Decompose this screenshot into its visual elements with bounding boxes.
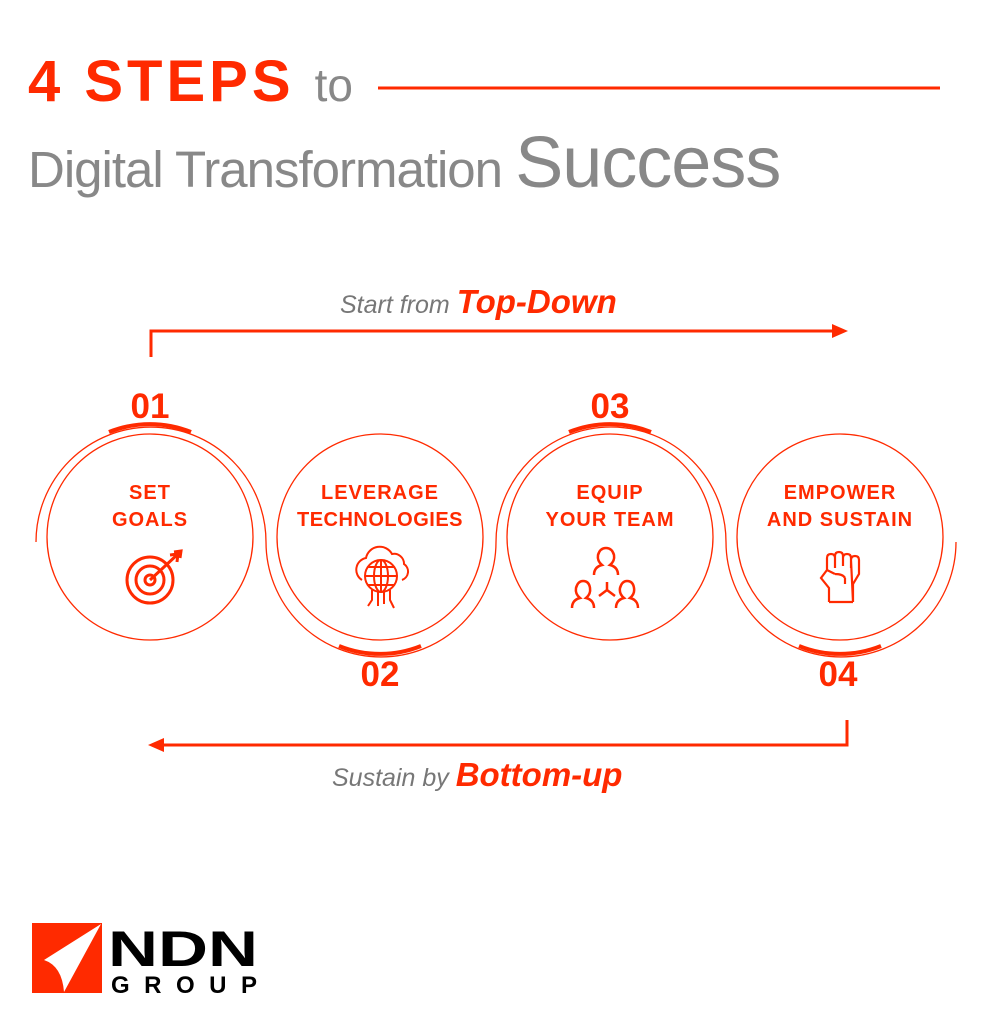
icon: team (572, 548, 638, 608)
step 4: EMPOWER (784, 482, 896, 504)
logo: NDN (108, 921, 258, 977)
bottom arrow (148, 720, 847, 793)
step 2: 02 (361, 655, 399, 694)
wave path (36, 427, 956, 657)
step 3 (507, 387, 713, 640)
title line 1: 4 STEPS to (28, 49, 353, 114)
step 2 (277, 434, 483, 694)
top arrow (151, 283, 848, 357)
icon: cloud globe (356, 547, 408, 608)
step 3: YOUR TEAM (546, 509, 674, 531)
step 4: AND SUSTAIN (767, 509, 913, 531)
step 2: LEVERAGE (321, 482, 439, 504)
top arrow: Start from Top-Down (340, 283, 617, 320)
step 1: SET (129, 482, 171, 504)
step 1: GOALS (112, 509, 188, 531)
title (28, 49, 780, 203)
step 3: EQUIP (576, 482, 644, 504)
step 1: 01 (131, 387, 169, 426)
step 1 (47, 387, 253, 640)
icon: fist (821, 552, 859, 602)
step 4: 04 (819, 655, 858, 694)
step 2: TECHNOLOGIES (297, 509, 463, 531)
bottom arrow: Sustain by Bottom-up (332, 756, 622, 793)
title line 2: Digital Transformation Success (28, 123, 780, 203)
logo: GROUP (111, 972, 257, 999)
step 4 (737, 434, 943, 694)
step 3: 03 (591, 387, 629, 426)
logo (32, 921, 258, 999)
icon: target (127, 551, 181, 603)
